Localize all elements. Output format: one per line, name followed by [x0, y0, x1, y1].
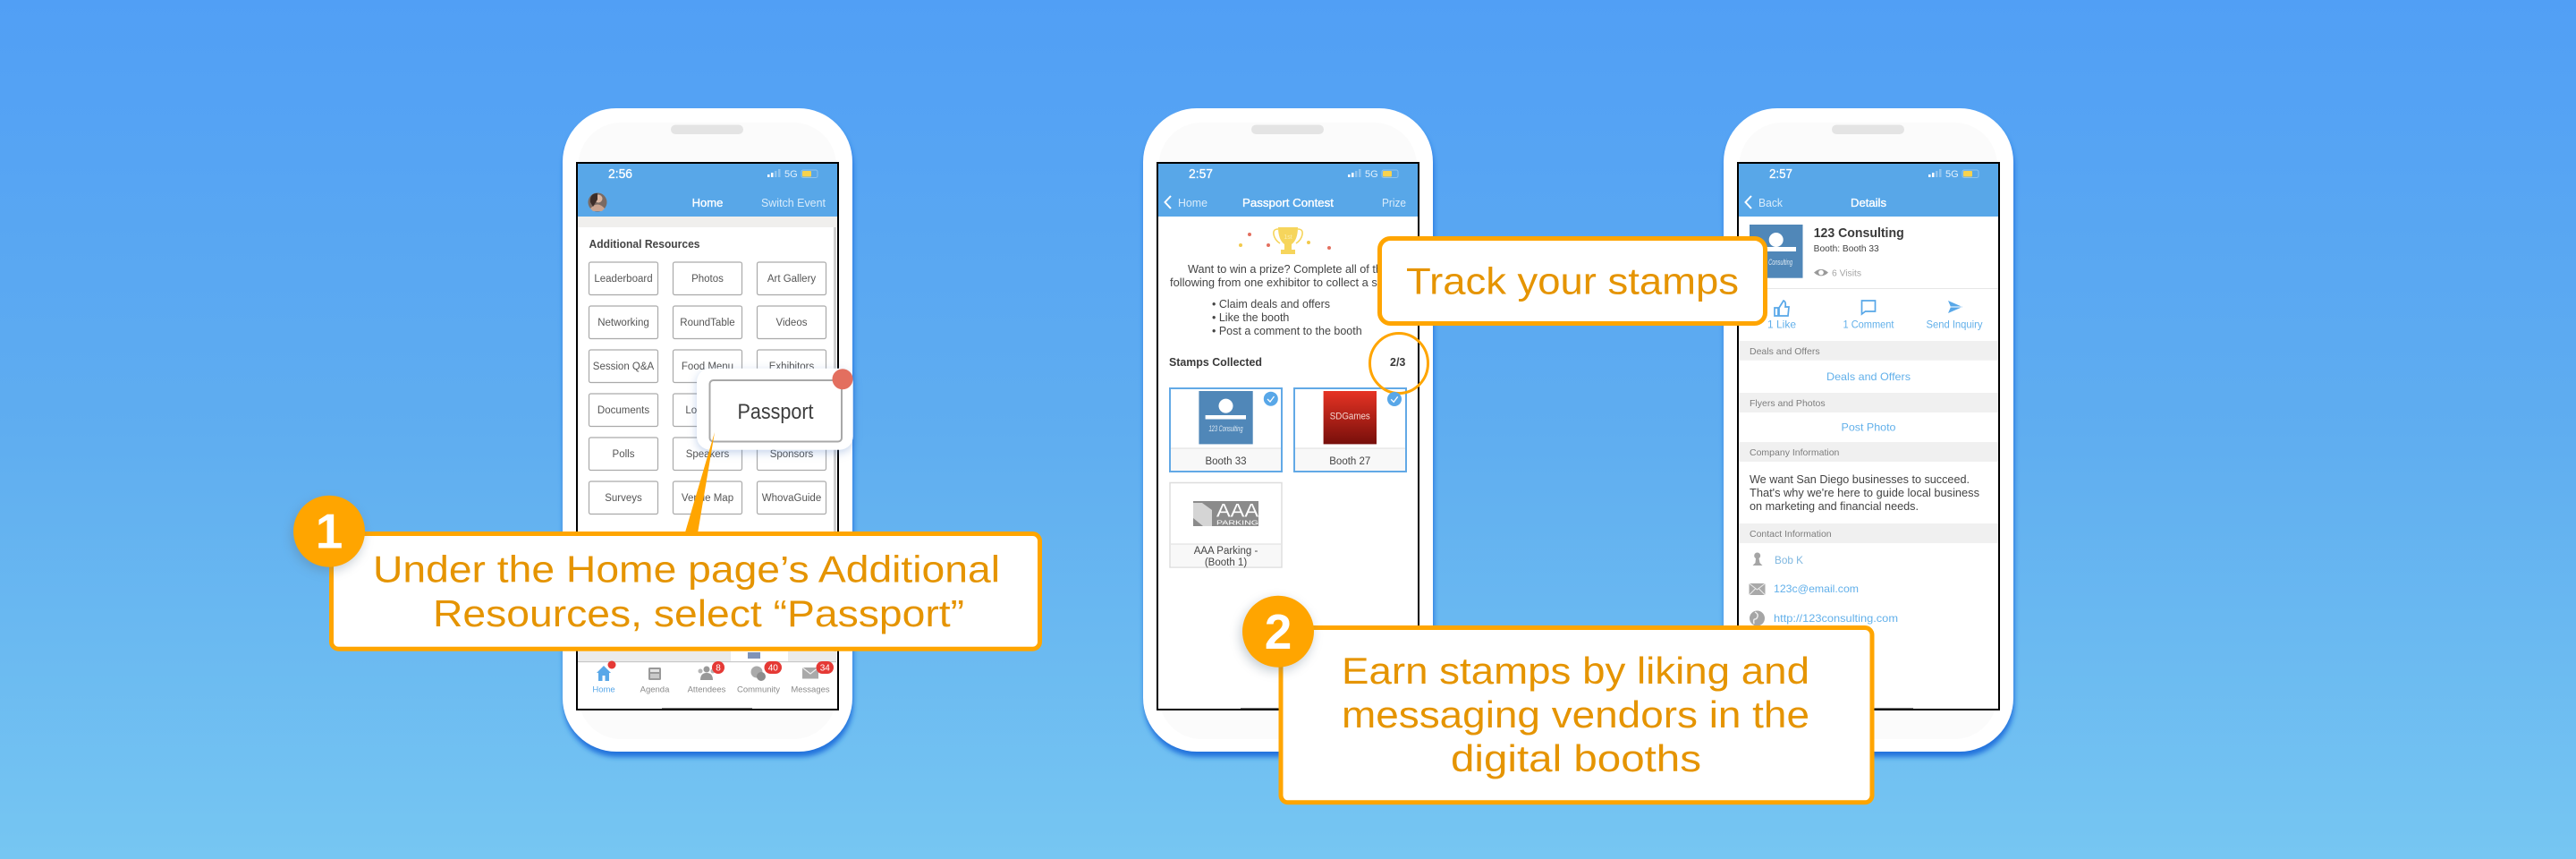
section: contact information: Contact Information: [1750, 529, 1832, 540]
app header: 5G: [1365, 169, 1378, 180]
resource button grid: Surveys: [605, 493, 642, 504]
section: company information: [1739, 442, 1998, 513]
passport zoom callout: Passport: [737, 400, 814, 424]
app header: 2:57: [1769, 167, 1792, 182]
stamp card: booth 27: SDGames: [1330, 412, 1370, 422]
resource button grid: Passport: [771, 405, 812, 416]
callout 1: select passport: Under the Home page’s Additional: [373, 549, 1000, 591]
callout 1: select passport: [331, 533, 1039, 649]
resource button grid: Food Menu: [682, 361, 733, 372]
callout 2: earn stamps: [1281, 628, 1872, 803]
section: company information: That's why we're here to guide local business: [1750, 487, 1979, 499]
app header: Back: [1758, 196, 1783, 209]
resource button grid: Photos: [691, 274, 724, 285]
section: flyers and photos: [1739, 393, 1998, 433]
section: contact information: http://123consulting.com: [1774, 612, 1898, 625]
action row: like, comment, inquiry: 1 Comment: [1843, 319, 1894, 331]
stamp card: AAA parking: AAA: [1216, 501, 1258, 521]
app header: Details: [1851, 196, 1886, 209]
section: company information: We want San Diego businesses to succeed.: [1750, 473, 1970, 486]
section: flyers and photos: Post Photo: [1841, 421, 1896, 433]
resource button grid: [589, 262, 826, 514]
exhibitor name and visits: 123 Consulting: [1814, 225, 1904, 241]
stamps collected row: [1169, 356, 1405, 369]
app header: 5G: [1945, 169, 1959, 180]
contest instructions text: • Claim deals and offers: [1212, 298, 1330, 310]
action row: like, comment, inquiry: 1 Like: [1767, 319, 1796, 331]
step badge 2: [1241, 596, 1314, 671]
bottom navigation bar: 8: [716, 664, 721, 673]
bottom navigation bar: Agenda: [640, 685, 670, 694]
highlight circle around 2/3: [1370, 333, 1428, 394]
resource button grid: Venue Map: [682, 493, 733, 504]
app header: Switch Event: [761, 196, 826, 209]
contest instructions text: following from one exhibitor to collect a stamp:: [1170, 276, 1406, 289]
exhibitor logo: 123 Consulting: [1758, 258, 1792, 268]
exhibitor logo: [1750, 225, 1803, 278]
callout 2: earn stamps: digital booths: [1451, 737, 1701, 779]
bottom navigation bar: [592, 660, 834, 694]
app header: [578, 164, 837, 217]
step badge 1: [292, 496, 365, 571]
phone 1: home page: [563, 108, 853, 757]
bottom navigation bar: Messages: [791, 685, 830, 694]
contest instructions text: • Post a comment to the booth: [1212, 325, 1362, 337]
stamp card: booth 27: Booth 27: [1329, 456, 1370, 467]
exhibitor name and visits: [1814, 225, 1904, 279]
resource button grid: Documents: [597, 405, 649, 416]
resource button grid: Sponsors: [770, 449, 814, 460]
stamps collected row: 2/3: [1390, 356, 1405, 369]
arrow: pointer from callout 1 to passport: [685, 432, 715, 533]
stamp card: booth 33: 123 Consulting: [1209, 424, 1243, 434]
section: deals and offers: [1739, 341, 1998, 383]
contest instructions text: • Like the booth: [1212, 311, 1289, 324]
section: flyers and photos: Flyers and Photos: [1750, 398, 1826, 409]
resource button grid: Art Gallery: [767, 274, 816, 285]
stamp card: booth 27: [1294, 388, 1406, 472]
section: contact information: 123c@email.com: [1774, 583, 1859, 595]
callout 1: select passport: Resources, select “Passport”: [433, 592, 964, 634]
callout: track your stamps: [1379, 238, 1766, 324]
check mark on booth 27 card: [1387, 392, 1402, 406]
callout: track your stamps: Track your stamps: [1406, 260, 1739, 302]
action row: like, comment, inquiry: [1767, 301, 1982, 331]
stamp card: booth 33: Booth 33: [1205, 456, 1247, 467]
resource button grid: Leaderboard: [594, 274, 653, 285]
icon: trophy with confetti: 1st: [1284, 234, 1292, 241]
resource button grid: Session Q&A: [593, 361, 655, 372]
app header: Home: [692, 196, 723, 209]
resource button grid: Locations: [685, 405, 730, 416]
passport zoom callout: [697, 369, 853, 450]
bottom navigation bar: Community: [737, 685, 780, 694]
app header: [1158, 164, 1418, 217]
resource button grid: Polls: [613, 449, 635, 460]
bottom navigation bar: 34: [820, 664, 830, 673]
exhibitor name and visits: Booth: Booth 33: [1814, 244, 1879, 254]
app header: 2:57: [1189, 167, 1213, 182]
stamp card: AAA parking: [1170, 483, 1282, 568]
section: deals and offers: Deals and Offers: [1750, 346, 1820, 357]
callout 2: earn stamps: Earn stamps by liking and: [1342, 650, 1809, 692]
resource button grid: Speakers: [686, 449, 730, 460]
section: company information: on marketing and financial needs.: [1750, 500, 1919, 513]
resource button grid: Networking: [597, 318, 649, 328]
app header: Home: [1178, 196, 1208, 209]
contest instructions text: Want to win a prize? Complete all of the: [1188, 263, 1388, 276]
app header: Prize: [1382, 196, 1406, 209]
phone 3: exhibitor details: [1724, 108, 2014, 757]
stamp card: AAA parking: AAA Parking -: [1194, 546, 1258, 557]
stamp card: AAA parking: (Booth 1): [1205, 557, 1247, 568]
resource button grid: Videos: [776, 318, 808, 328]
icon: trophy with confetti: [1239, 227, 1331, 254]
bottom navigation bar: Attendees: [688, 685, 726, 694]
stamps collected row: Stamps Collected: [1169, 356, 1262, 369]
section: deals and offers: Deals and Offers: [1826, 370, 1911, 383]
heading: additional resources: Additional Resources: [589, 238, 700, 251]
callout 2: earn stamps: messaging vendors in the: [1342, 693, 1809, 736]
phone 2: passport contest: [1143, 108, 1434, 757]
bottom navigation bar: 40: [768, 664, 778, 673]
app header: 2:56: [608, 167, 632, 182]
section: contact information: [1739, 523, 1998, 626]
section: contact information: Bob K: [1775, 554, 1803, 566]
exhibitor name and visits: 6 Visits: [1832, 268, 1861, 279]
resource button grid: WhovaGuide: [762, 493, 821, 504]
step badge 2: 2: [1265, 604, 1292, 659]
action row: like, comment, inquiry: Send Inquiry: [1927, 319, 1982, 331]
stamp card: AAA parking: PARKING: [1216, 519, 1258, 526]
contest instructions text: [1170, 263, 1406, 337]
resource button grid: RoundTable: [680, 318, 735, 328]
resource button grid: Exhibitors: [769, 361, 814, 372]
app header: Passport Contest: [1242, 196, 1334, 209]
app header: [1739, 164, 1998, 217]
section: company information: Company Information: [1750, 447, 1840, 458]
bottom navigation bar: Home: [592, 685, 615, 694]
app header: 5G: [784, 169, 798, 180]
step badge 1: 1: [316, 504, 343, 559]
stamp card: booth 33: [1170, 388, 1282, 472]
